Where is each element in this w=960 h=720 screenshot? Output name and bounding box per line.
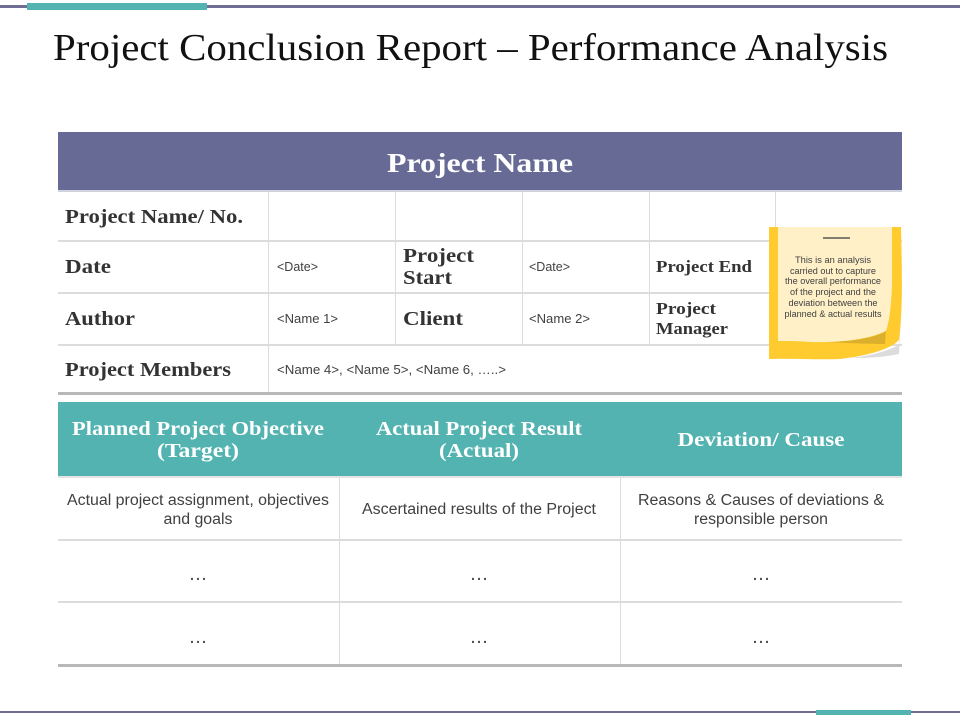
objectives body text: … [752,564,770,585]
note text: carried out to capture [790,266,876,276]
callout: sticky note [769,227,902,359]
objectives header: Deviation/ Cause [678,429,845,451]
row values: <Date> [277,260,318,274]
row labels: Manager [656,319,728,338]
row labels: Project [656,299,717,318]
panel: objectives table [58,402,902,667]
row values: <Name 2> [529,312,590,326]
top accent bar [0,3,960,10]
row labels: Start [403,268,453,289]
objectives body text: … [470,564,488,585]
row values: <Name 4>, <Name 5>, <Name 6, …..> [277,363,506,377]
row labels: Author [65,309,135,330]
project name header [58,132,902,190]
objectives body text: Actual project assignment, objectives [67,492,329,509]
row labels [65,207,752,381]
objectives header: Actual Project Result [376,418,582,440]
note text: deviation between the [788,298,878,308]
row values: <Name 1> [277,312,338,326]
objectives body text [67,492,885,648]
row labels: Client [403,309,464,330]
panel: project details table [58,132,902,395]
note text: This is an analysis [795,255,872,265]
objectives body text: … [470,627,488,648]
objectives header: Planned Project Objective [72,418,324,440]
row labels: Project End [656,257,752,276]
objectives header: (Actual) [439,440,519,462]
objectives body text: … [188,627,208,648]
row labels: Date [65,257,111,278]
objectives body text: … [752,627,770,648]
project name header: Project Name [387,148,573,178]
objectives body text: and goals [164,511,233,528]
objectives body text: Ascertained results of the Project [362,501,597,518]
objectives header [58,402,902,476]
objectives body text: … [188,564,208,585]
objectives body text: responsible person [694,511,828,528]
title: Project Conclusion Report – Performance Analysis [53,27,888,69]
objectives body text: Reasons & Causes of deviations & [638,492,885,509]
row values [277,260,590,377]
row values: <Date> [529,260,570,274]
note text: of the project and the [790,287,876,297]
note text [784,255,882,319]
note text: the overall performance [785,276,881,286]
row labels: Project Members [65,360,231,381]
row labels: Project Name/ No. [65,207,243,228]
row labels: Project [403,246,475,267]
bottom accent bar [0,710,960,715]
objectives header: (Target) [157,440,239,462]
note text: planned & actual results [784,309,882,319]
